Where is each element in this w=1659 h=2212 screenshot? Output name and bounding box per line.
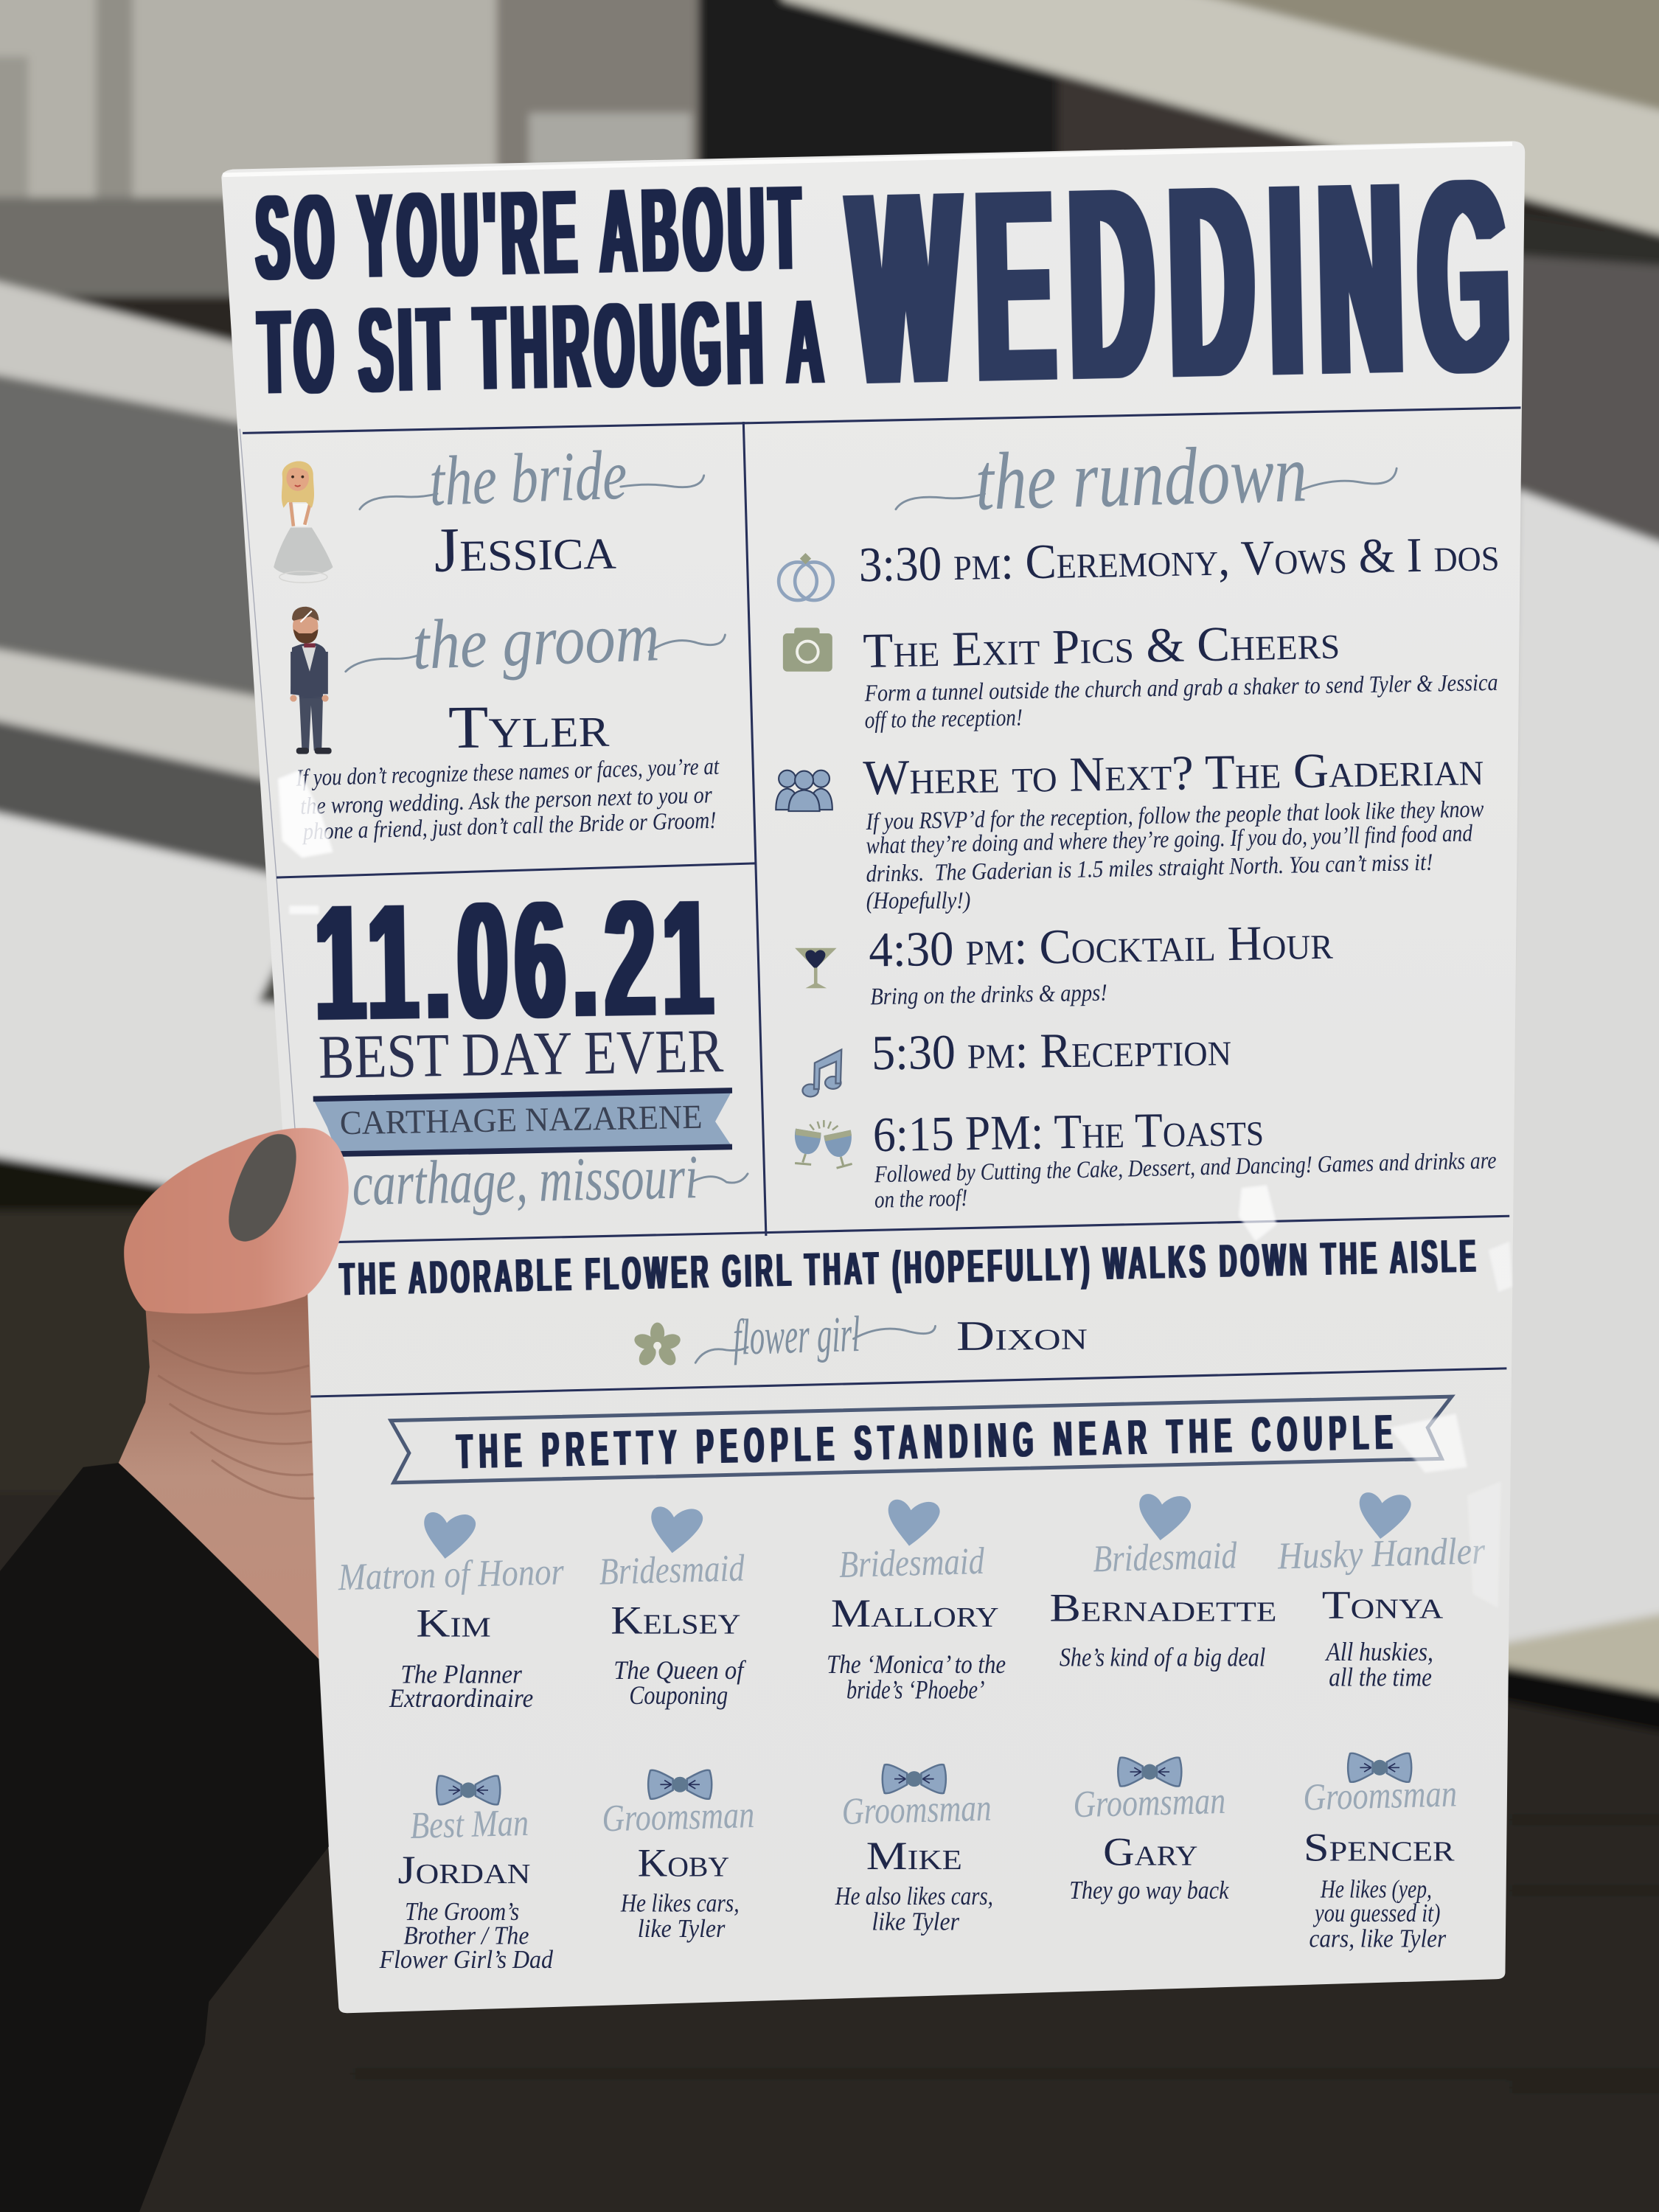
person: Bernadette: She’s kind of a big deal bbox=[1060, 1643, 1265, 1672]
icon: people bbox=[776, 771, 832, 811]
text: wrong wedding note: the wrong wedding. Ask the person next to you or bbox=[300, 782, 712, 820]
person: Kelsey: Kelsey bbox=[611, 1599, 740, 1643]
name: Jessica: Jessica bbox=[434, 512, 616, 585]
icon: martini bbox=[795, 948, 837, 988]
text: toast details: on the roof! bbox=[874, 1185, 968, 1214]
text: reception directions: (Hopefully!) bbox=[866, 888, 970, 914]
icon: nail bbox=[229, 1134, 296, 1242]
person: Kim: Extraordinaire bbox=[389, 1683, 533, 1713]
person: Jordan: Jordan bbox=[398, 1848, 530, 1892]
person: Jordan: Flower Girl’s Dad bbox=[379, 1946, 554, 1974]
heading: the bride: the bride bbox=[428, 436, 628, 521]
person: Gary: They go way back bbox=[1069, 1877, 1229, 1905]
person: Spencer bbox=[1303, 1753, 1458, 1952]
person: Kelsey: The Queen of bbox=[613, 1655, 747, 1685]
dividers bbox=[243, 408, 1520, 1397]
schedule: reception: 5:30 pm: Reception bbox=[872, 1021, 1231, 1080]
schedule: ceremony: 3:30 pm: Ceremony, Vows & I dos bbox=[858, 526, 1500, 592]
text: reception directions bbox=[865, 796, 1484, 914]
person: Tonya: Tonya bbox=[1322, 1583, 1444, 1627]
text: reception directions: drinks. The Gaderian is 1.5 miles straight North. You can’t miss it! bbox=[866, 849, 1433, 888]
person: Kim: Kim bbox=[416, 1601, 491, 1645]
icon: rings bbox=[779, 553, 833, 600]
person: Spencer: Groomsman bbox=[1303, 1773, 1458, 1819]
person: Tonya bbox=[1276, 1486, 1486, 1691]
person: Tonya: All huskies, bbox=[1325, 1637, 1433, 1666]
person: Kelsey: Bridesmaid bbox=[599, 1547, 745, 1593]
person: Bernadette: Bernadette bbox=[1049, 1585, 1277, 1630]
person: Mallory: Bridesmaid bbox=[838, 1540, 985, 1586]
name: Dixon: Dixon bbox=[956, 1312, 1088, 1360]
script: carthage, missouri: carthage, missouri bbox=[352, 1143, 698, 1219]
person: Jordan: Brother / The bbox=[403, 1921, 529, 1950]
heading: the groom: the groom bbox=[411, 597, 661, 684]
person: Spencer: you guessed it) bbox=[1313, 1899, 1440, 1927]
text: exit pics details: Form a tunnel outside the church and grab a shaker to send Tyler & Jessica bbox=[863, 669, 1498, 707]
schedule: where to next: Where to Next? The Gaderian bbox=[863, 741, 1484, 805]
person: Bernadette: Bridesmaid bbox=[1093, 1534, 1237, 1580]
text: SO YOU'RE ABOUT bbox=[254, 161, 807, 305]
palm and wrinkled thumb base bbox=[119, 1291, 319, 1659]
panel: the couple bbox=[274, 436, 725, 845]
hand holding the card bbox=[119, 1128, 349, 1659]
person: Koby: Koby bbox=[638, 1841, 729, 1885]
panel: flower girl bbox=[339, 1231, 1480, 1368]
icon: groom bbox=[290, 607, 332, 754]
sleeve bbox=[0, 1463, 329, 2212]
text: exit pics details bbox=[863, 669, 1498, 734]
text: TO SIT THROUGH A bbox=[257, 275, 830, 420]
person: Koby bbox=[602, 1770, 755, 1943]
text: cocktail details: Bring on the drinks & apps! bbox=[870, 980, 1107, 1010]
person: Spencer: He likes (yep, bbox=[1320, 1875, 1432, 1903]
person: Kim: Matron of Honor bbox=[337, 1551, 565, 1599]
person: Koby: Groomsman bbox=[602, 1794, 755, 1840]
text: reception directions: what they’re doing and where they’re going. If you do, you’ll find food and bbox=[866, 820, 1473, 860]
text: toast details bbox=[874, 1147, 1497, 1214]
date: 11.06.21 bbox=[314, 866, 721, 1055]
title: so you're about to sit through a bbox=[254, 161, 830, 420]
icon: music notes bbox=[802, 1049, 841, 1096]
person: Spencer: Spencer bbox=[1304, 1826, 1455, 1870]
person: Koby: He likes cars, bbox=[620, 1889, 740, 1917]
icon: bride bbox=[274, 462, 333, 582]
schedule: the toasts: 6:15 PM: The Toasts bbox=[872, 1102, 1264, 1162]
banner: carthage nazarene bbox=[313, 1091, 732, 1154]
thumb bbox=[124, 1128, 349, 1313]
banner: the pretty people bbox=[391, 1397, 1452, 1483]
icon: toasting glasses bbox=[795, 1120, 852, 1168]
person: Mike: Groomsman bbox=[841, 1787, 992, 1833]
person: Mallory: The ‘Monica’ to the bbox=[827, 1649, 1006, 1679]
person: Tonya: Husky Handler bbox=[1276, 1530, 1486, 1578]
panel: paper card bbox=[221, 141, 1525, 2013]
person: Spencer: cars, like Tyler bbox=[1310, 1924, 1447, 1952]
person: Mike: He also likes cars, bbox=[835, 1882, 993, 1910]
plastic wrap glare bbox=[278, 771, 1512, 1608]
icon: flower bbox=[633, 1323, 682, 1368]
person: Gary: Gary bbox=[1103, 1829, 1197, 1874]
person: Jordan: The Groom’s bbox=[405, 1898, 519, 1926]
person: Jordan bbox=[379, 1775, 554, 1974]
text: wrong wedding note: phone a friend, just don’t call the Bride or Groom! bbox=[302, 807, 717, 845]
text: toast details: Followed by Cutting the Cake, Dessert, and Dancing! Games and drinks are bbox=[874, 1147, 1497, 1188]
person: Jordan: Best Man bbox=[410, 1802, 529, 1847]
person: Kelsey: Couponing bbox=[629, 1680, 728, 1710]
panel: the rundown bbox=[776, 428, 1500, 1214]
person: Mallory: Mallory bbox=[831, 1591, 999, 1635]
schedule: exit pics: The Exit Pics & Cheers bbox=[863, 615, 1340, 678]
person: Koby: like Tyler bbox=[638, 1915, 726, 1943]
banner: carthage nazarene: CARTHAGE NAZARENE bbox=[339, 1098, 703, 1141]
panel: date and venue bbox=[313, 866, 748, 1219]
icon: camera bbox=[783, 627, 832, 672]
person: Kelsey bbox=[599, 1500, 747, 1710]
heading: the rundown: the rundown bbox=[974, 428, 1308, 528]
person: Gary: Groomsman bbox=[1073, 1780, 1226, 1826]
text: exit pics details: off to the reception! bbox=[864, 705, 1023, 734]
person: Tonya: all the time bbox=[1329, 1662, 1432, 1691]
person: Mallory bbox=[827, 1494, 1006, 1705]
text: wrong wedding note: If you don’t recognize these names or faces, you’re at bbox=[295, 754, 720, 792]
text: reception directions: If you RSVP’d for the reception, follow the people that look like they know bbox=[865, 796, 1484, 835]
text: wrong wedding note bbox=[295, 754, 720, 845]
name: Tyler: Tyler bbox=[448, 692, 610, 761]
script: flower girl: flower girl bbox=[732, 1306, 860, 1366]
person: Mike: like Tyler bbox=[872, 1907, 960, 1935]
person: Kim: The Planner bbox=[400, 1660, 523, 1689]
person: Mallory: bride’s ‘Phoebe’ bbox=[846, 1675, 984, 1705]
panel: wedding party bbox=[337, 1486, 1486, 1974]
person: Kim bbox=[337, 1506, 565, 1713]
schedule: cocktail hour: 4:30 pm: Cocktail Hour bbox=[869, 915, 1334, 978]
person: Gary bbox=[1069, 1758, 1229, 1905]
person: Mike: Mike bbox=[866, 1834, 962, 1878]
text: best day ever: BEST DAY EVER bbox=[318, 1017, 724, 1092]
person: Mike bbox=[835, 1764, 993, 1935]
person: Bernadette bbox=[1049, 1488, 1277, 1672]
